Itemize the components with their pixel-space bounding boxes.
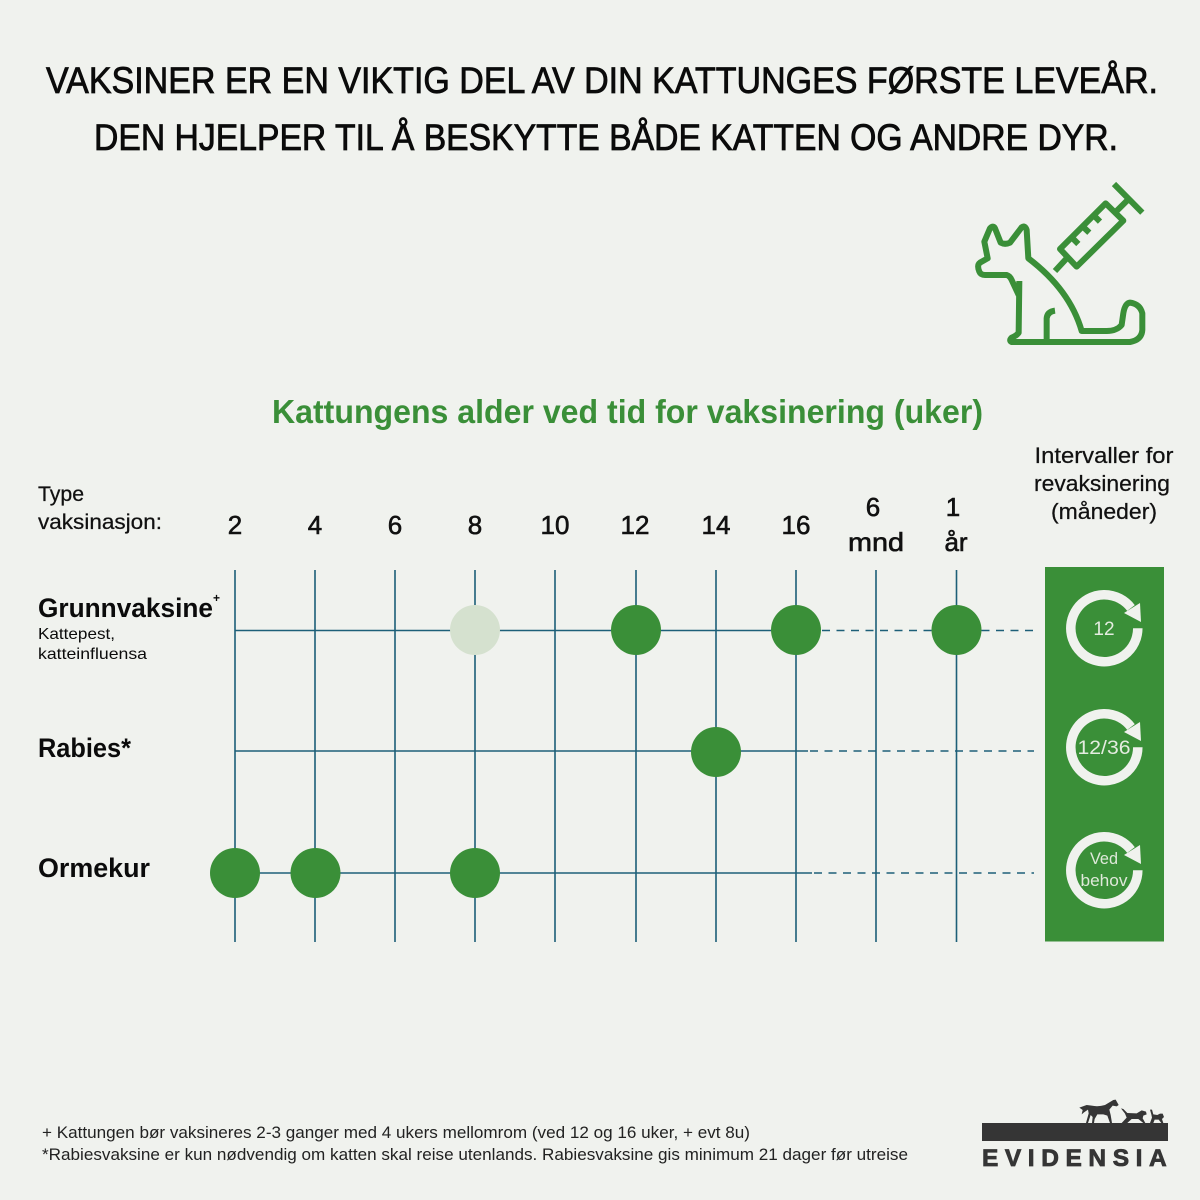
vaccination dots: Ormekur [210,848,500,898]
row type header: Type [38,482,84,506]
title: DEN HJELPER TIL Å BESKYTTE BÅDE KATTEN OG ANDRE DYR. [94,117,1118,158]
row label: Grunnvaksine: + [213,591,220,605]
vaccination dots: Grunnvaksine [450,605,982,655]
icon: cycle as needed: Ved [1090,849,1118,868]
revaccination interval header: revaksinering [1034,471,1170,496]
logo: Evidensia: EVIDENSIA [982,1145,1167,1172]
row label: Ormekur: Ormekur [38,853,150,883]
age column labels: 10 [541,510,569,540]
age column labels: 8 [468,510,482,540]
icon: cycle as needed: behov [1080,871,1128,890]
row type header [38,482,162,534]
age column labels: 6 [388,510,402,540]
age column labels: mnd [848,527,904,557]
row label: Rabies: Rabies* [38,733,131,763]
row type header: vaksinasjon: [38,510,162,534]
icon: cycle as needed [1071,837,1141,904]
age column labels [228,492,968,557]
age column labels: år [944,527,968,557]
revaccination interval header [1034,443,1174,524]
icon: cycle 12/36 months [1071,714,1141,781]
footnotes: + Kattungen bør vaksineres 2-3 ganger med 4 ukers mellomrom (ved 12 og 16 uker, + evt 8u) [42,1123,750,1142]
revaccination interval header: (måneder) [1051,499,1157,524]
icon: cycle 12 months [1071,595,1141,662]
panel: revaccination intervals [1045,567,1164,942]
row label: Grunnvaksine: Grunnvaksine [38,593,213,623]
icon: cat with syringe [978,184,1142,342]
row label: Grunnvaksine: Kattepest, [38,626,115,643]
age column labels: 16 [782,510,810,540]
chart heading: Kattungens alder ved tid for vaksinering (uker) [272,393,983,430]
row label: Grunnvaksine [38,591,220,663]
age column labels: 2 [228,510,242,540]
age column labels: 12 [621,510,649,540]
icon: cycle 12/36 months: 12/36 [1078,738,1130,759]
age column labels: 1 [946,492,960,522]
row label: Grunnvaksine: katteinfluensa [38,646,147,663]
age column labels: 6 [866,492,880,522]
logo: Evidensia [982,1100,1168,1172]
vaccination dot: Rabies [691,727,741,777]
schedule grid [235,570,1034,942]
title [46,60,1158,158]
footnotes [42,1123,908,1164]
age column labels: 14 [702,510,730,540]
icon: cycle 12 months: 12 [1093,619,1115,640]
revaccination interval header: Intervaller for [1034,443,1174,468]
footnotes: *Rabiesvaksine er kun nødvendig om katten skal reise utenlands. Rabiesvaksine gis minimum 21 dager før utreise [42,1145,908,1164]
age column labels: 4 [308,510,322,540]
